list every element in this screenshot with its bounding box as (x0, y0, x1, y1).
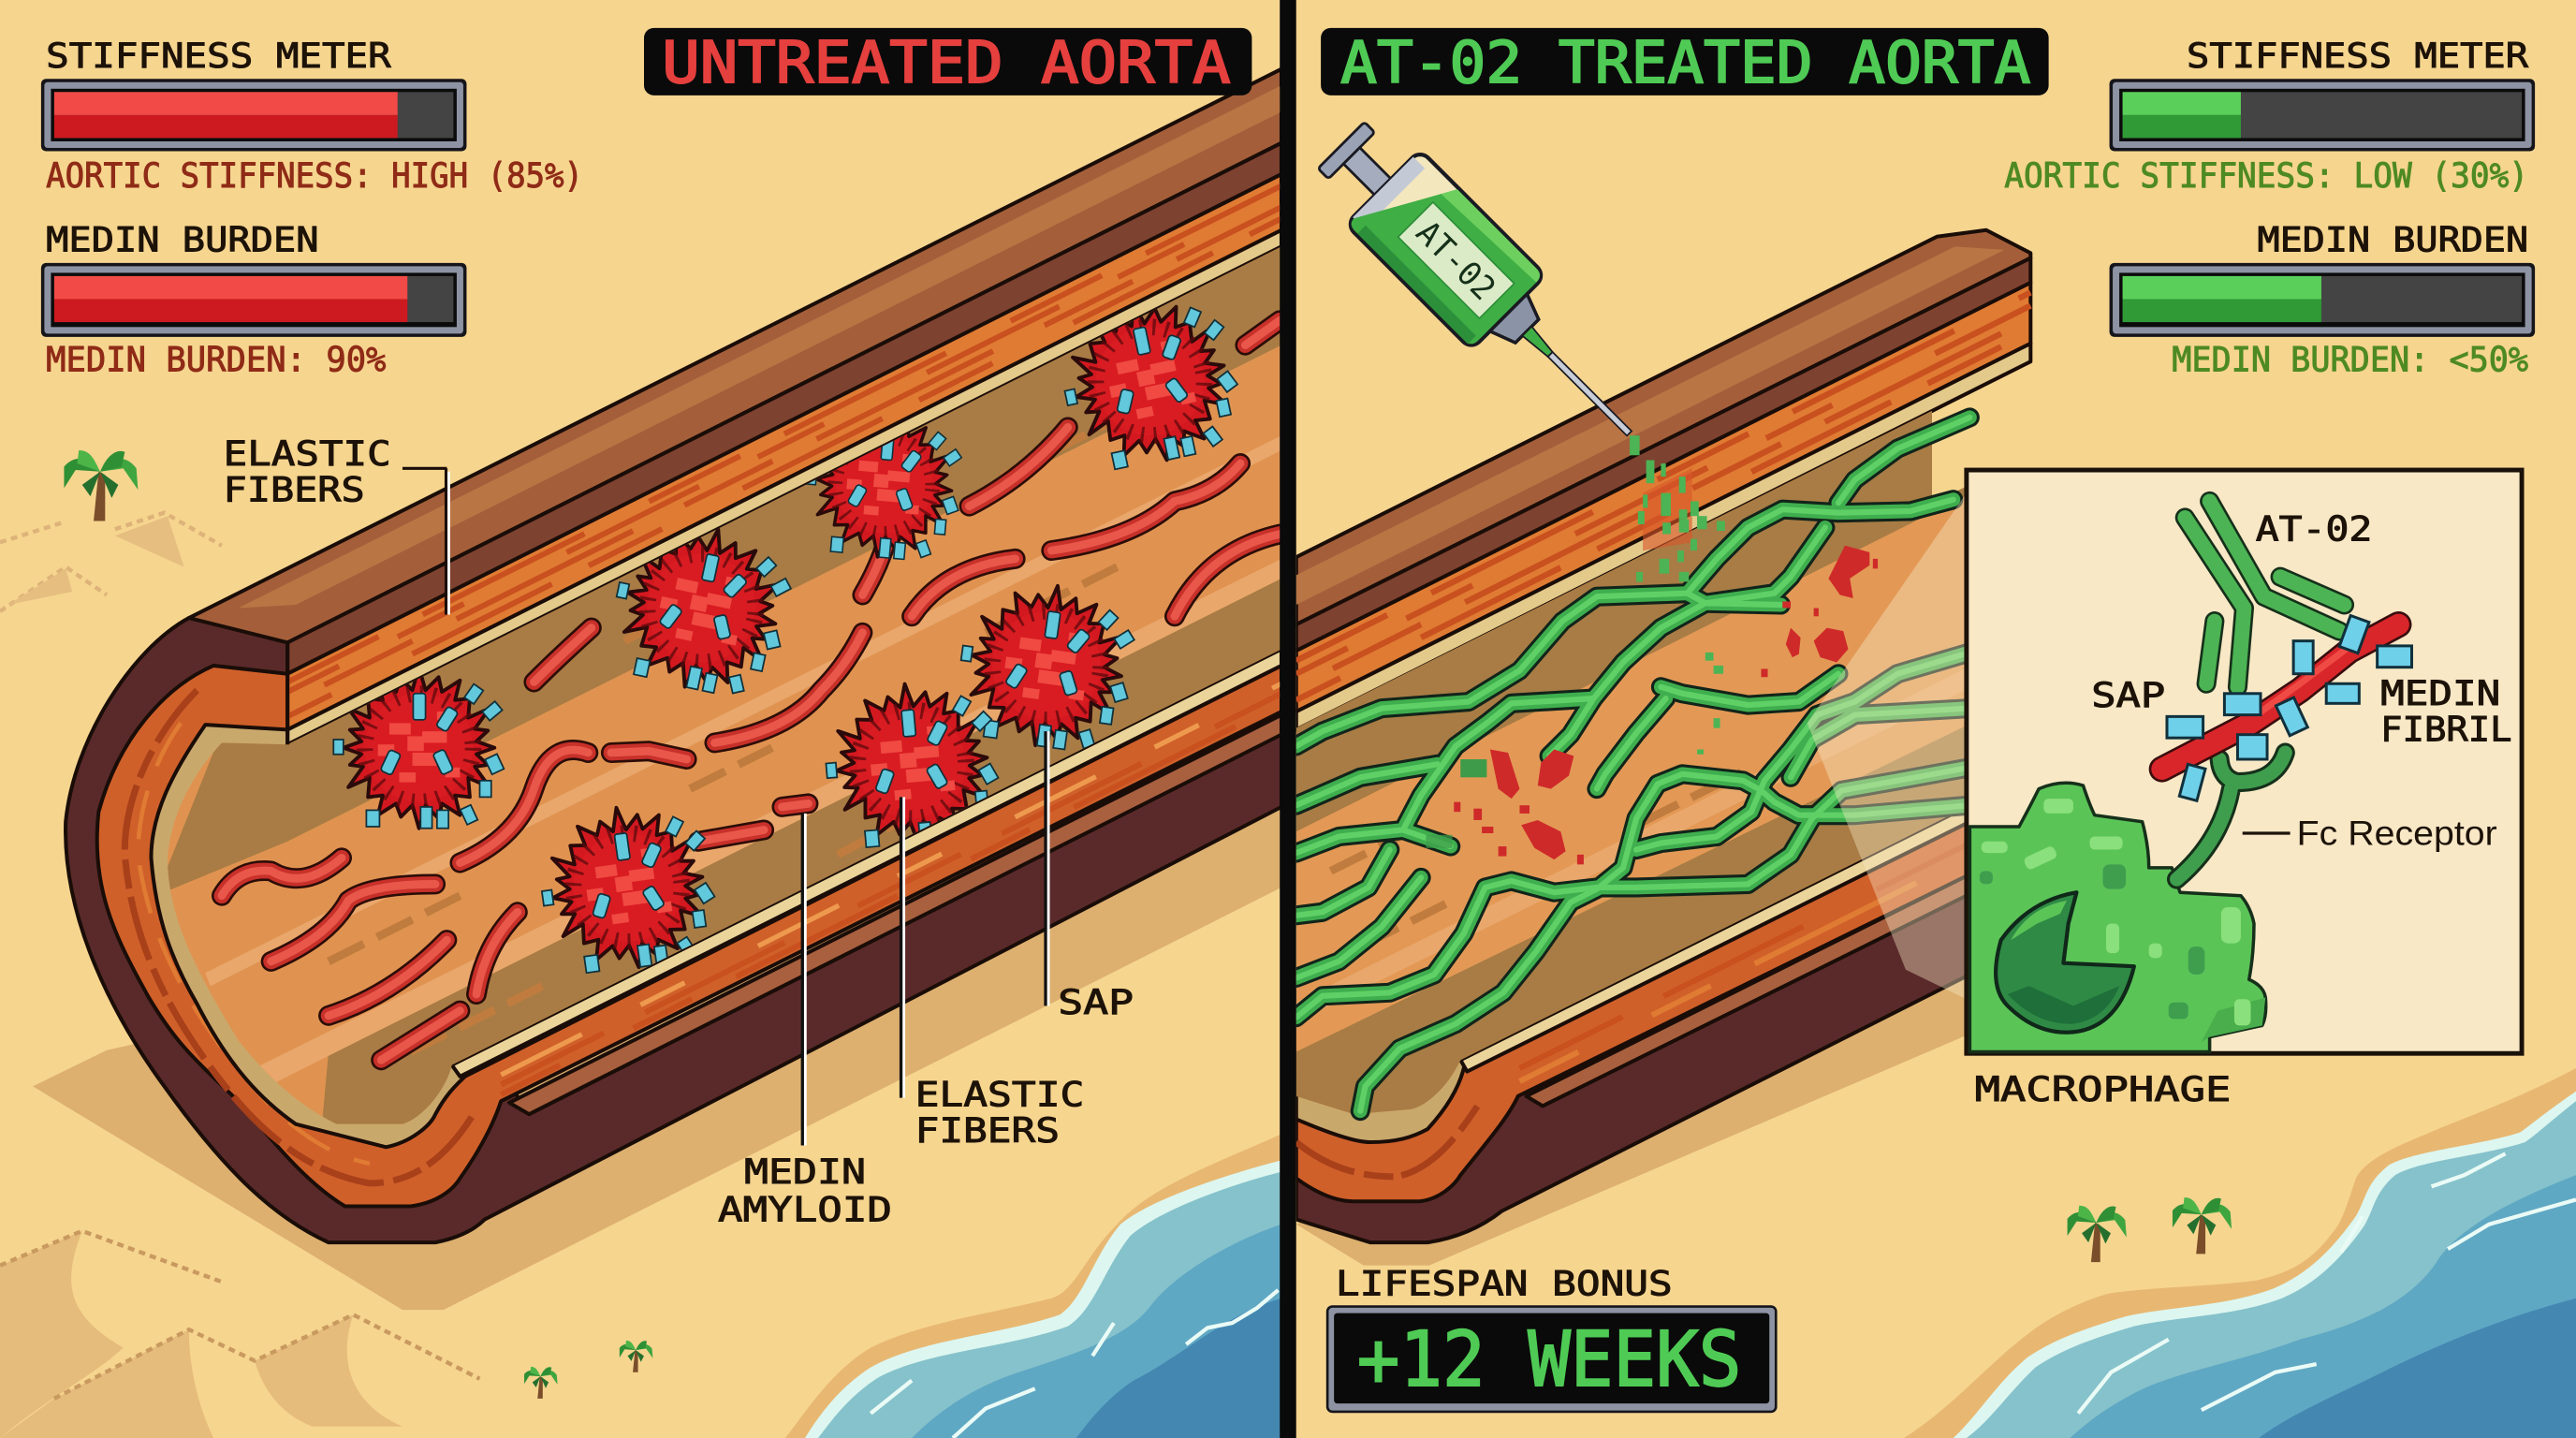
fibers fading green patches (1426, 759, 1486, 848)
stiffness meter bar 85% (41, 79, 466, 151)
inset label: Fc Receptor: Fc Receptor (2297, 814, 2497, 852)
panel: untreated aorta (0, 0, 1298, 1438)
cluster 1 (333, 668, 504, 829)
AT-02 fibers network (1296, 418, 1969, 1111)
palm: small 1 (524, 1367, 558, 1399)
medin burden bar below 50% (2110, 263, 2535, 337)
medin clusters with SAP (333, 285, 1250, 979)
label: elastic fibers lower: FIBERS (915, 1110, 1060, 1151)
water (785, 1134, 1281, 1438)
cluster 3 (616, 528, 792, 695)
cream intima layer (151, 649, 1281, 1147)
inset panel: mechanism (1967, 470, 2522, 1053)
lumen interior (148, 230, 1298, 1151)
syringe label (1398, 202, 1515, 318)
outer wall (1296, 805, 1967, 1242)
outer adventitia wall (66, 618, 1281, 1242)
panel: AT-02 treated aorta (1296, 0, 2576, 1438)
AT-02 droplets (1630, 435, 1725, 755)
Fc receptor stalk (2177, 753, 2285, 879)
cluster 2 (541, 805, 716, 974)
orange media layer (97, 174, 1281, 1206)
syringe AT-02 (1304, 108, 1666, 471)
title banner: AT-02 treated aorta: AT-02 TREATED AORTA (1340, 30, 2030, 96)
sand dunes (0, 513, 479, 1438)
label: elastic fibers upper: ELASTIC (224, 433, 391, 474)
inset label: AT-02: AT-02 (2256, 509, 2372, 550)
inset label: medin fibril (2380, 673, 2512, 750)
lifespan bonus display: +12 WEEKS (1357, 1316, 1741, 1404)
lower wall layers (1296, 805, 1967, 1201)
SAP molecules (2167, 615, 2411, 800)
medin amyloid worms (222, 320, 1280, 1060)
inset label: SAP: SAP (2091, 675, 2165, 715)
readout: medin burden: MEDIN BURDEN: <50% (2172, 340, 2528, 380)
label: medin amyloid (718, 1152, 892, 1229)
leader: elastic fibers upper (402, 468, 448, 615)
inset label: medin fibril: MEDIN (2380, 673, 2500, 713)
nucleus (1996, 892, 2134, 1033)
readout: medin burden: MEDIN BURDEN: 90% (46, 340, 386, 380)
medin burden bar 90% (41, 263, 466, 337)
AT-02 antibody (2185, 501, 2345, 687)
heading: medin burden: MEDIN BURDEN (2258, 220, 2528, 260)
title banner: untreated aorta: UNTREATED AORTA (662, 30, 1231, 96)
leader: medin amyloid (802, 814, 805, 1146)
label: medin amyloid: AMYLOID (718, 1189, 892, 1229)
palm: small 2 (620, 1341, 652, 1372)
zoom beam (1808, 493, 1967, 999)
top wall surface (189, 69, 1281, 674)
stiffness meter bar 30% (2110, 79, 2535, 151)
cluster 4 (806, 426, 962, 560)
label: macrophage: MACROPHAGE (1975, 1069, 2231, 1109)
palm: large (64, 450, 138, 521)
palm: right 1 (2068, 1206, 2127, 1262)
treated aorta cutaway (1296, 230, 2030, 1242)
palm: right 2 (2173, 1197, 2232, 1254)
cluster 5 (1063, 305, 1239, 470)
lumen interior (1296, 391, 1986, 1134)
ground shadow of the aorta (1296, 920, 1967, 1266)
ground shadow of the aorta (33, 789, 1281, 1310)
readout: aortic stiffness: AORTIC STIFFNESS: LOW (30%) (2004, 155, 2528, 196)
inset label: medin fibril: FIBRIL (2380, 710, 2512, 750)
readout: aortic stiffness: AORTIC STIFFNESS: HIGH (85%) (46, 155, 583, 196)
medin fibril (2162, 624, 2398, 770)
heading: stiffness meter: STIFFNESS METER (46, 36, 392, 76)
water (1904, 1068, 2576, 1438)
leader: Fc receptor (2243, 832, 2291, 834)
aorta cross-section cutaway (66, 69, 1298, 1242)
leader: sap (1046, 731, 1048, 1005)
label: medin amyloid: MEDIN (744, 1152, 866, 1192)
heading: stiffness meter: STIFFNESS METER (2187, 36, 2529, 76)
macrophage (1969, 783, 2266, 1051)
divider (1280, 0, 1296, 1438)
top wall (1296, 230, 2030, 729)
label: elastic fibers upper: FIBERS (224, 469, 365, 509)
leader: elastic fibers lower (901, 797, 904, 1098)
label: elastic fibers lower (915, 1074, 1084, 1151)
label: elastic fibers upper (227, 440, 388, 502)
label: elastic fibers lower: ELASTIC (915, 1074, 1084, 1114)
heading: medin burden: MEDIN BURDEN (46, 220, 318, 260)
fragmented medin debris (1454, 546, 1878, 864)
syringe label: AT-02 (1409, 213, 1503, 308)
heading: lifespan bonus: LIFESPAN BONUS (1336, 1263, 1673, 1303)
label: sap: SAP (1058, 982, 1134, 1022)
cluster 7 (820, 677, 1003, 852)
cluster 6 (960, 584, 1135, 751)
